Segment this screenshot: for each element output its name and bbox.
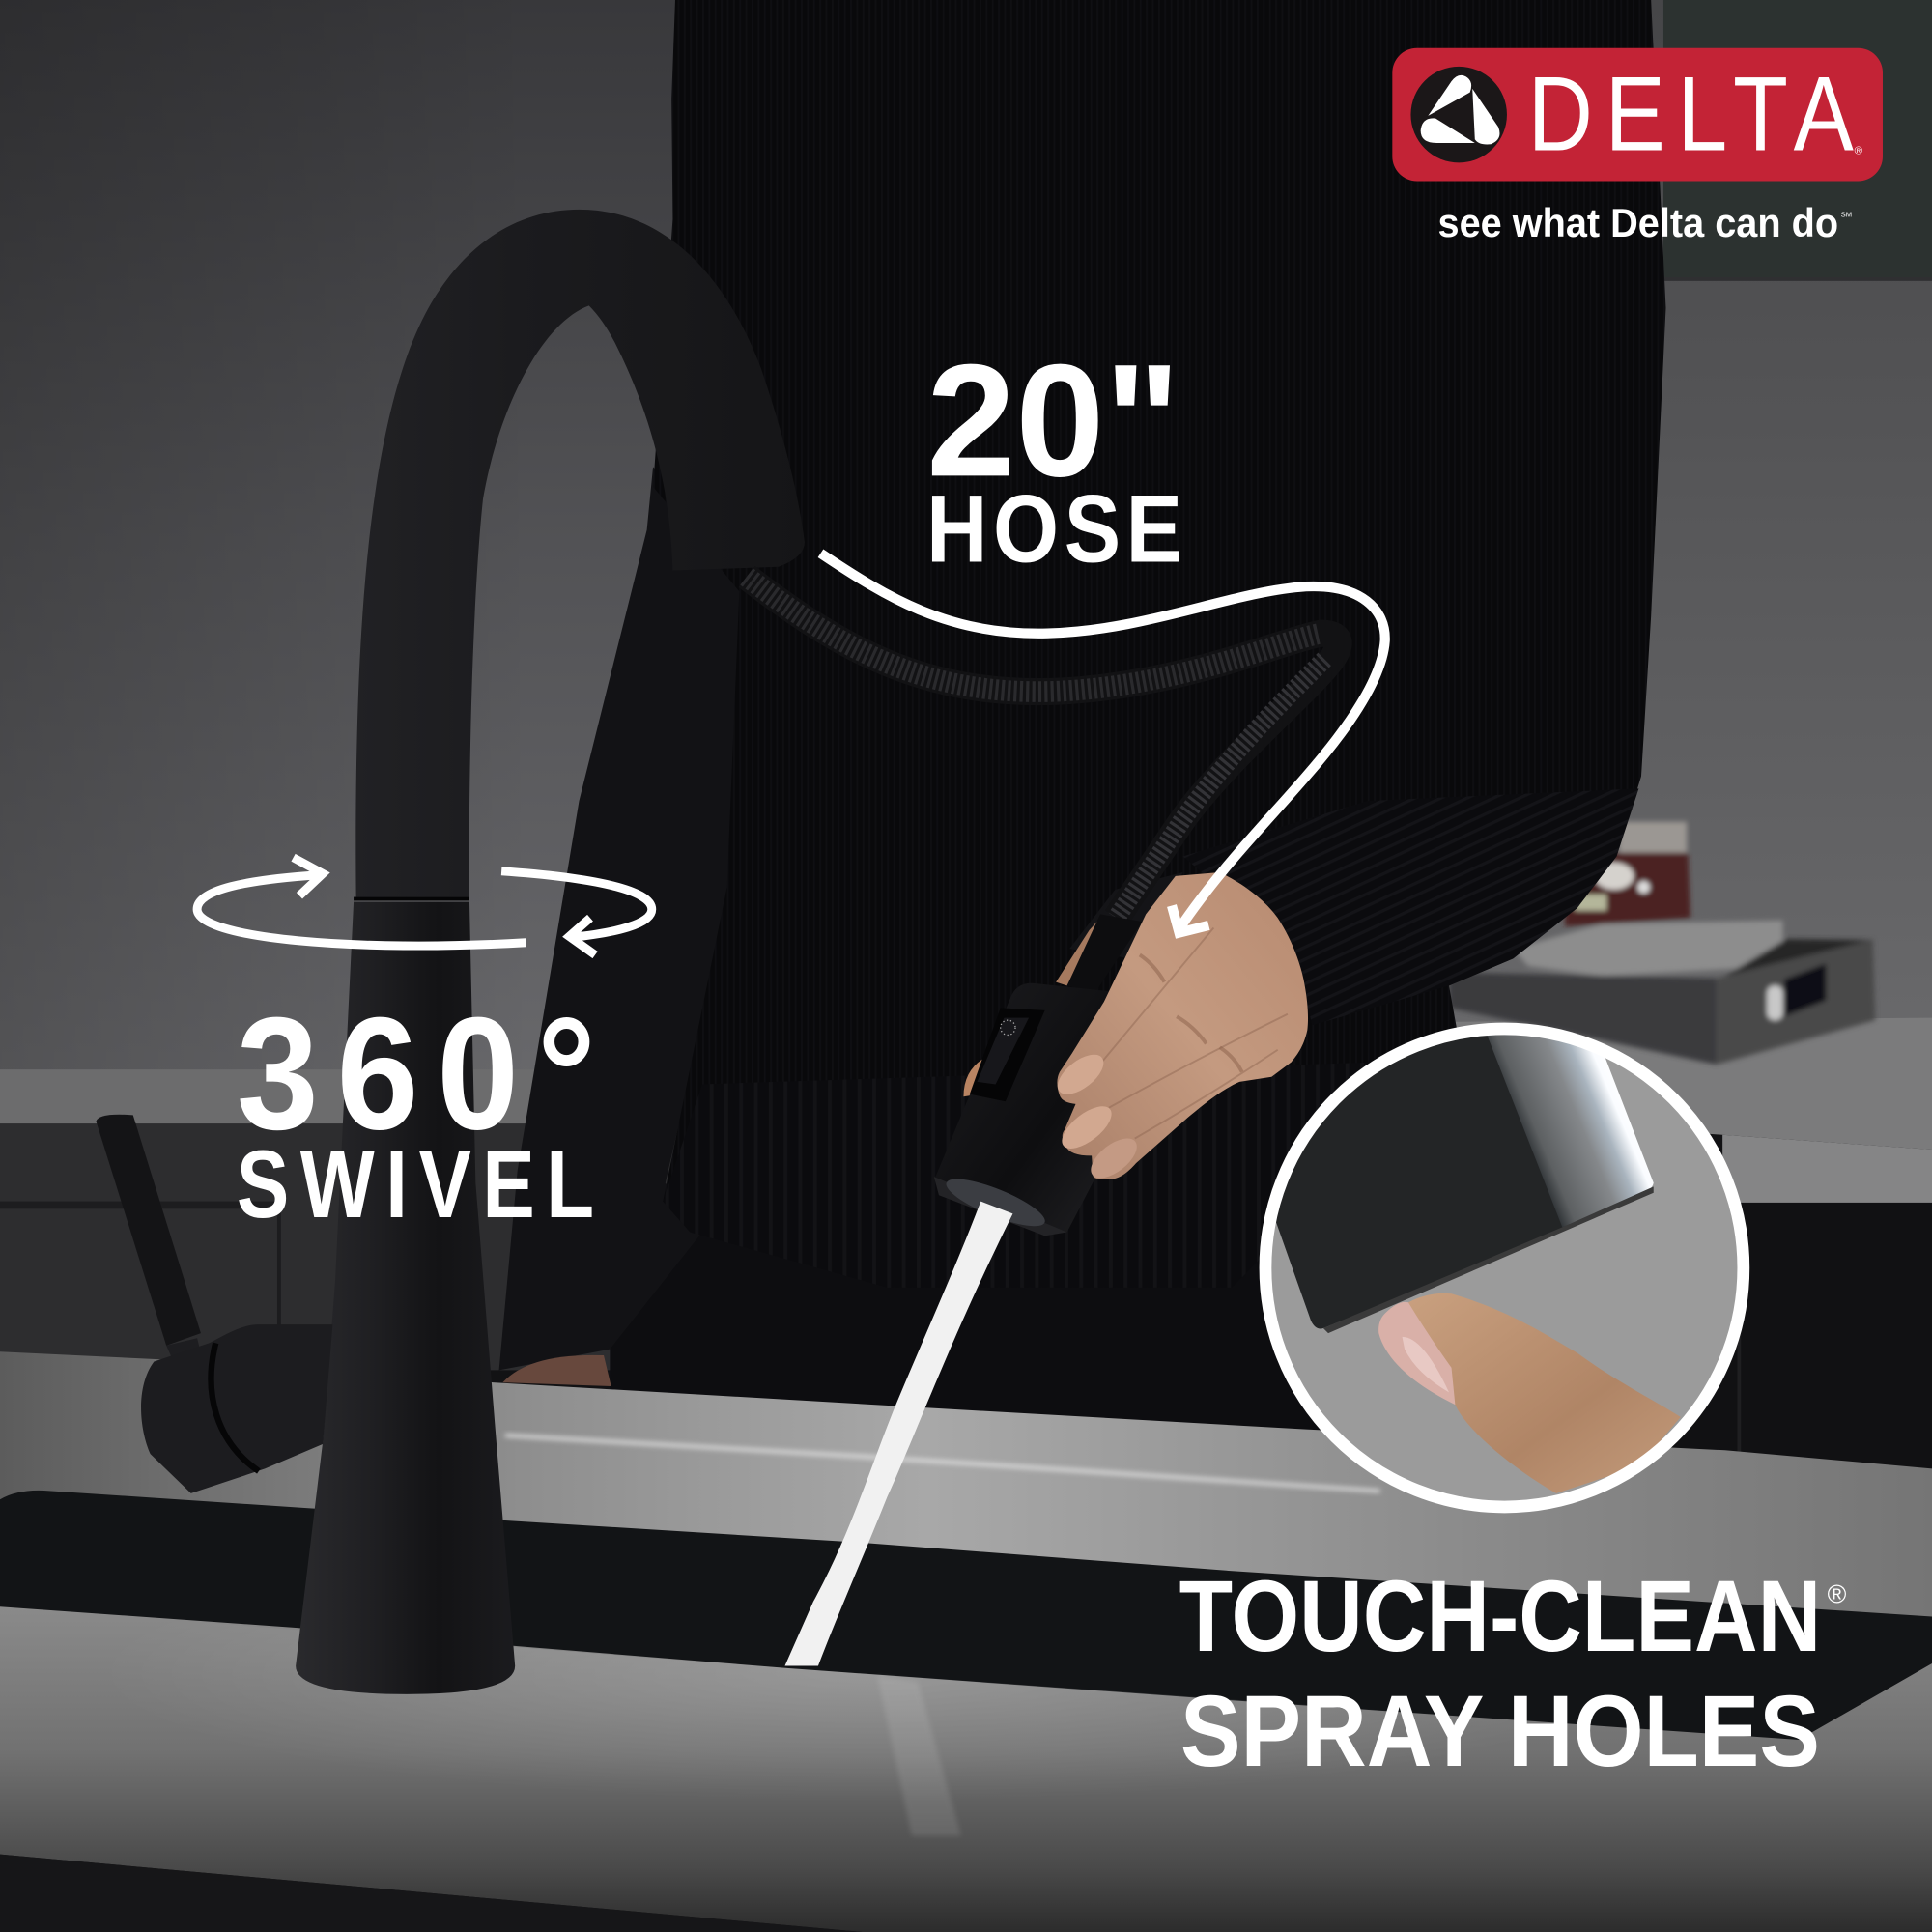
wordmark: DELTA: [1528, 54, 1854, 173]
handle hub: [141, 1324, 332, 1493]
spray head closeup: [1276, 1036, 1570, 1329]
button panel: [970, 1008, 1045, 1101]
sleeve left: [499, 467, 764, 1370]
swivel rotation arrows: [197, 858, 652, 955]
hose label: HOSE: [926, 474, 1182, 582]
inset lens: touch-clean spray holes: [1260, 1022, 1750, 1513]
fingernails: [1051, 1047, 1110, 1102]
hose heading: [926, 331, 1182, 582]
spray holes label: SPRAY HOLES: [1180, 1675, 1820, 1788]
touch-clean heading: [1179, 1560, 1847, 1788]
service mark: SM: [1841, 210, 1852, 218]
tagline: see what Delta can do: [1438, 200, 1838, 245]
wrist at counter: [502, 1355, 611, 1386]
hand: [1057, 872, 1308, 1179]
knuckle creases: [1140, 955, 1242, 1072]
right counter and cabinet: [1355, 1018, 1932, 1150]
360 degrees figure: 360°: [237, 983, 596, 1163]
person in black sweater: [499, 0, 1665, 1441]
faucet: [96, 210, 1339, 1694]
gooseneck spout: [355, 210, 805, 897]
thumb tip: [963, 1057, 985, 1096]
thumb web skin: [1056, 918, 1100, 985]
fingertip: [1408, 1293, 1681, 1493]
hose length arrow: [820, 554, 1385, 933]
cuff: [1182, 788, 1638, 1025]
Delta logo badge: [1392, 48, 1883, 181]
spray face: [934, 1177, 1067, 1236]
swivel heading: [237, 983, 596, 1238]
fingernail: [1378, 1302, 1455, 1405]
trousers: [610, 1109, 1479, 1441]
spray head body: [934, 983, 1115, 1233]
finger separators: [1103, 927, 1288, 1139]
torso: [653, 0, 1665, 1288]
registered mark: ®: [1855, 145, 1863, 156]
faucet base and neck: [296, 902, 515, 1694]
registered mark: ®: [1828, 1579, 1847, 1608]
metal edge: [1488, 1035, 1654, 1227]
hem ribbing: [663, 1060, 1454, 1288]
lever handle: [96, 1115, 201, 1346]
pull-down braided hose: [747, 577, 1339, 918]
sink basin: [0, 1491, 1932, 1740]
swivel label: SWIVEL: [237, 1132, 594, 1238]
logo mark: [1410, 67, 1507, 162]
water stream: [784, 1202, 1012, 1665]
front counter: [0, 1606, 1932, 1932]
hand and spray head: [934, 872, 1308, 1236]
tray and jars: [1359, 616, 1875, 1065]
sprayer shank: [1067, 914, 1142, 994]
20 inch figure: 20": [926, 331, 1180, 510]
countertop: [0, 1351, 1932, 1932]
touch-clean label: TOUCH-CLEAN: [1179, 1560, 1821, 1673]
counter back lip: [0, 1351, 1932, 1627]
